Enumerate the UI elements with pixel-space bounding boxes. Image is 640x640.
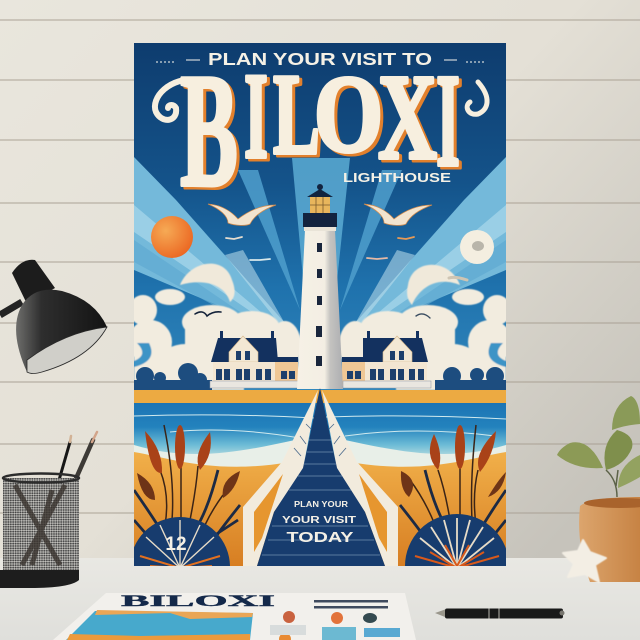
visit today text on stairs: TODAY (286, 529, 354, 546)
houses left and right (210, 331, 431, 388)
orange drop shadow letters: O (317, 56, 386, 178)
sea (134, 403, 506, 463)
pen on desk (435, 608, 564, 618)
orange drop shadow letters (183, 77, 462, 190)
sea wave highlights (134, 415, 506, 438)
left sunburst fan with number (134, 517, 230, 566)
poster: Biloxi lighthouse (134, 43, 506, 566)
right sunburst fan (405, 514, 506, 566)
boardwalk steps (257, 388, 385, 566)
lantern room (310, 197, 330, 213)
cream title letters (180, 74, 459, 188)
right flourish (467, 82, 487, 114)
visit today text on stairs (282, 501, 356, 542)
dunes (134, 452, 506, 566)
clouds left (128, 264, 301, 390)
left sunburst fan with number: 12 (165, 534, 187, 555)
visit today text on stairs: PLAN YOUR (294, 500, 348, 509)
cream title letters: B (180, 41, 238, 221)
desk lamp (0, 260, 107, 374)
right house (342, 331, 431, 388)
plant leaves and stem (557, 396, 640, 497)
orange drop shadow letters: B (183, 44, 241, 224)
lighthouse tower (297, 184, 343, 389)
starfish (563, 540, 606, 582)
gallery (303, 213, 337, 227)
left house (210, 331, 298, 388)
lamp arm (0, 302, 22, 315)
poster sky background (134, 43, 506, 393)
visit today text on stairs: YOUR VISIT (282, 514, 357, 526)
boardwalk rails (243, 390, 398, 566)
left flourish (152, 78, 180, 123)
tree line right (435, 367, 506, 390)
foam (134, 440, 506, 467)
pale moon disc (460, 230, 494, 264)
subtitle: lighthouse: LIGHTHOUSE (343, 170, 451, 185)
right cattails and reeds (399, 424, 506, 534)
cream title letters: X (378, 50, 437, 185)
desk surface (0, 558, 640, 640)
cream title letters: L (273, 51, 320, 179)
beach strip (134, 390, 506, 403)
tree line left (134, 363, 212, 390)
orange drop shadow letters: X (381, 52, 440, 188)
lamp dome (16, 290, 107, 372)
brochure panels (270, 625, 400, 640)
brochure text block (314, 600, 388, 608)
title: BILOXI (152, 74, 490, 190)
brochure icons (279, 611, 377, 640)
brochure on desk (53, 593, 416, 640)
brochure title: BILOXI (121, 593, 275, 610)
clouds right (339, 265, 512, 390)
lamp neck (12, 260, 55, 304)
cream title letters: O (314, 53, 383, 175)
large seagull left (208, 204, 276, 225)
mesh pen holder (0, 474, 79, 588)
title: BILOXI: I (436, 46, 460, 194)
title: BILOXI: I (439, 48, 463, 196)
lamp opening (27, 327, 107, 374)
orange sun (151, 216, 193, 258)
tower windows (316, 243, 322, 366)
large seagull right (364, 204, 432, 225)
heading: plan your visit to: PLAN YOUR VISIT TO (208, 49, 432, 69)
sun rays (134, 157, 506, 324)
brochure map (66, 610, 253, 640)
left cattails and reeds (134, 424, 241, 536)
terracotta pot (579, 497, 640, 582)
orange drop shadow letters: L (276, 54, 323, 182)
cream title letters: I (244, 47, 268, 184)
lantern roof (307, 189, 333, 197)
pencils (36, 432, 97, 560)
small distant birds (195, 237, 467, 318)
orange drop shadow letters: I (247, 50, 271, 186)
